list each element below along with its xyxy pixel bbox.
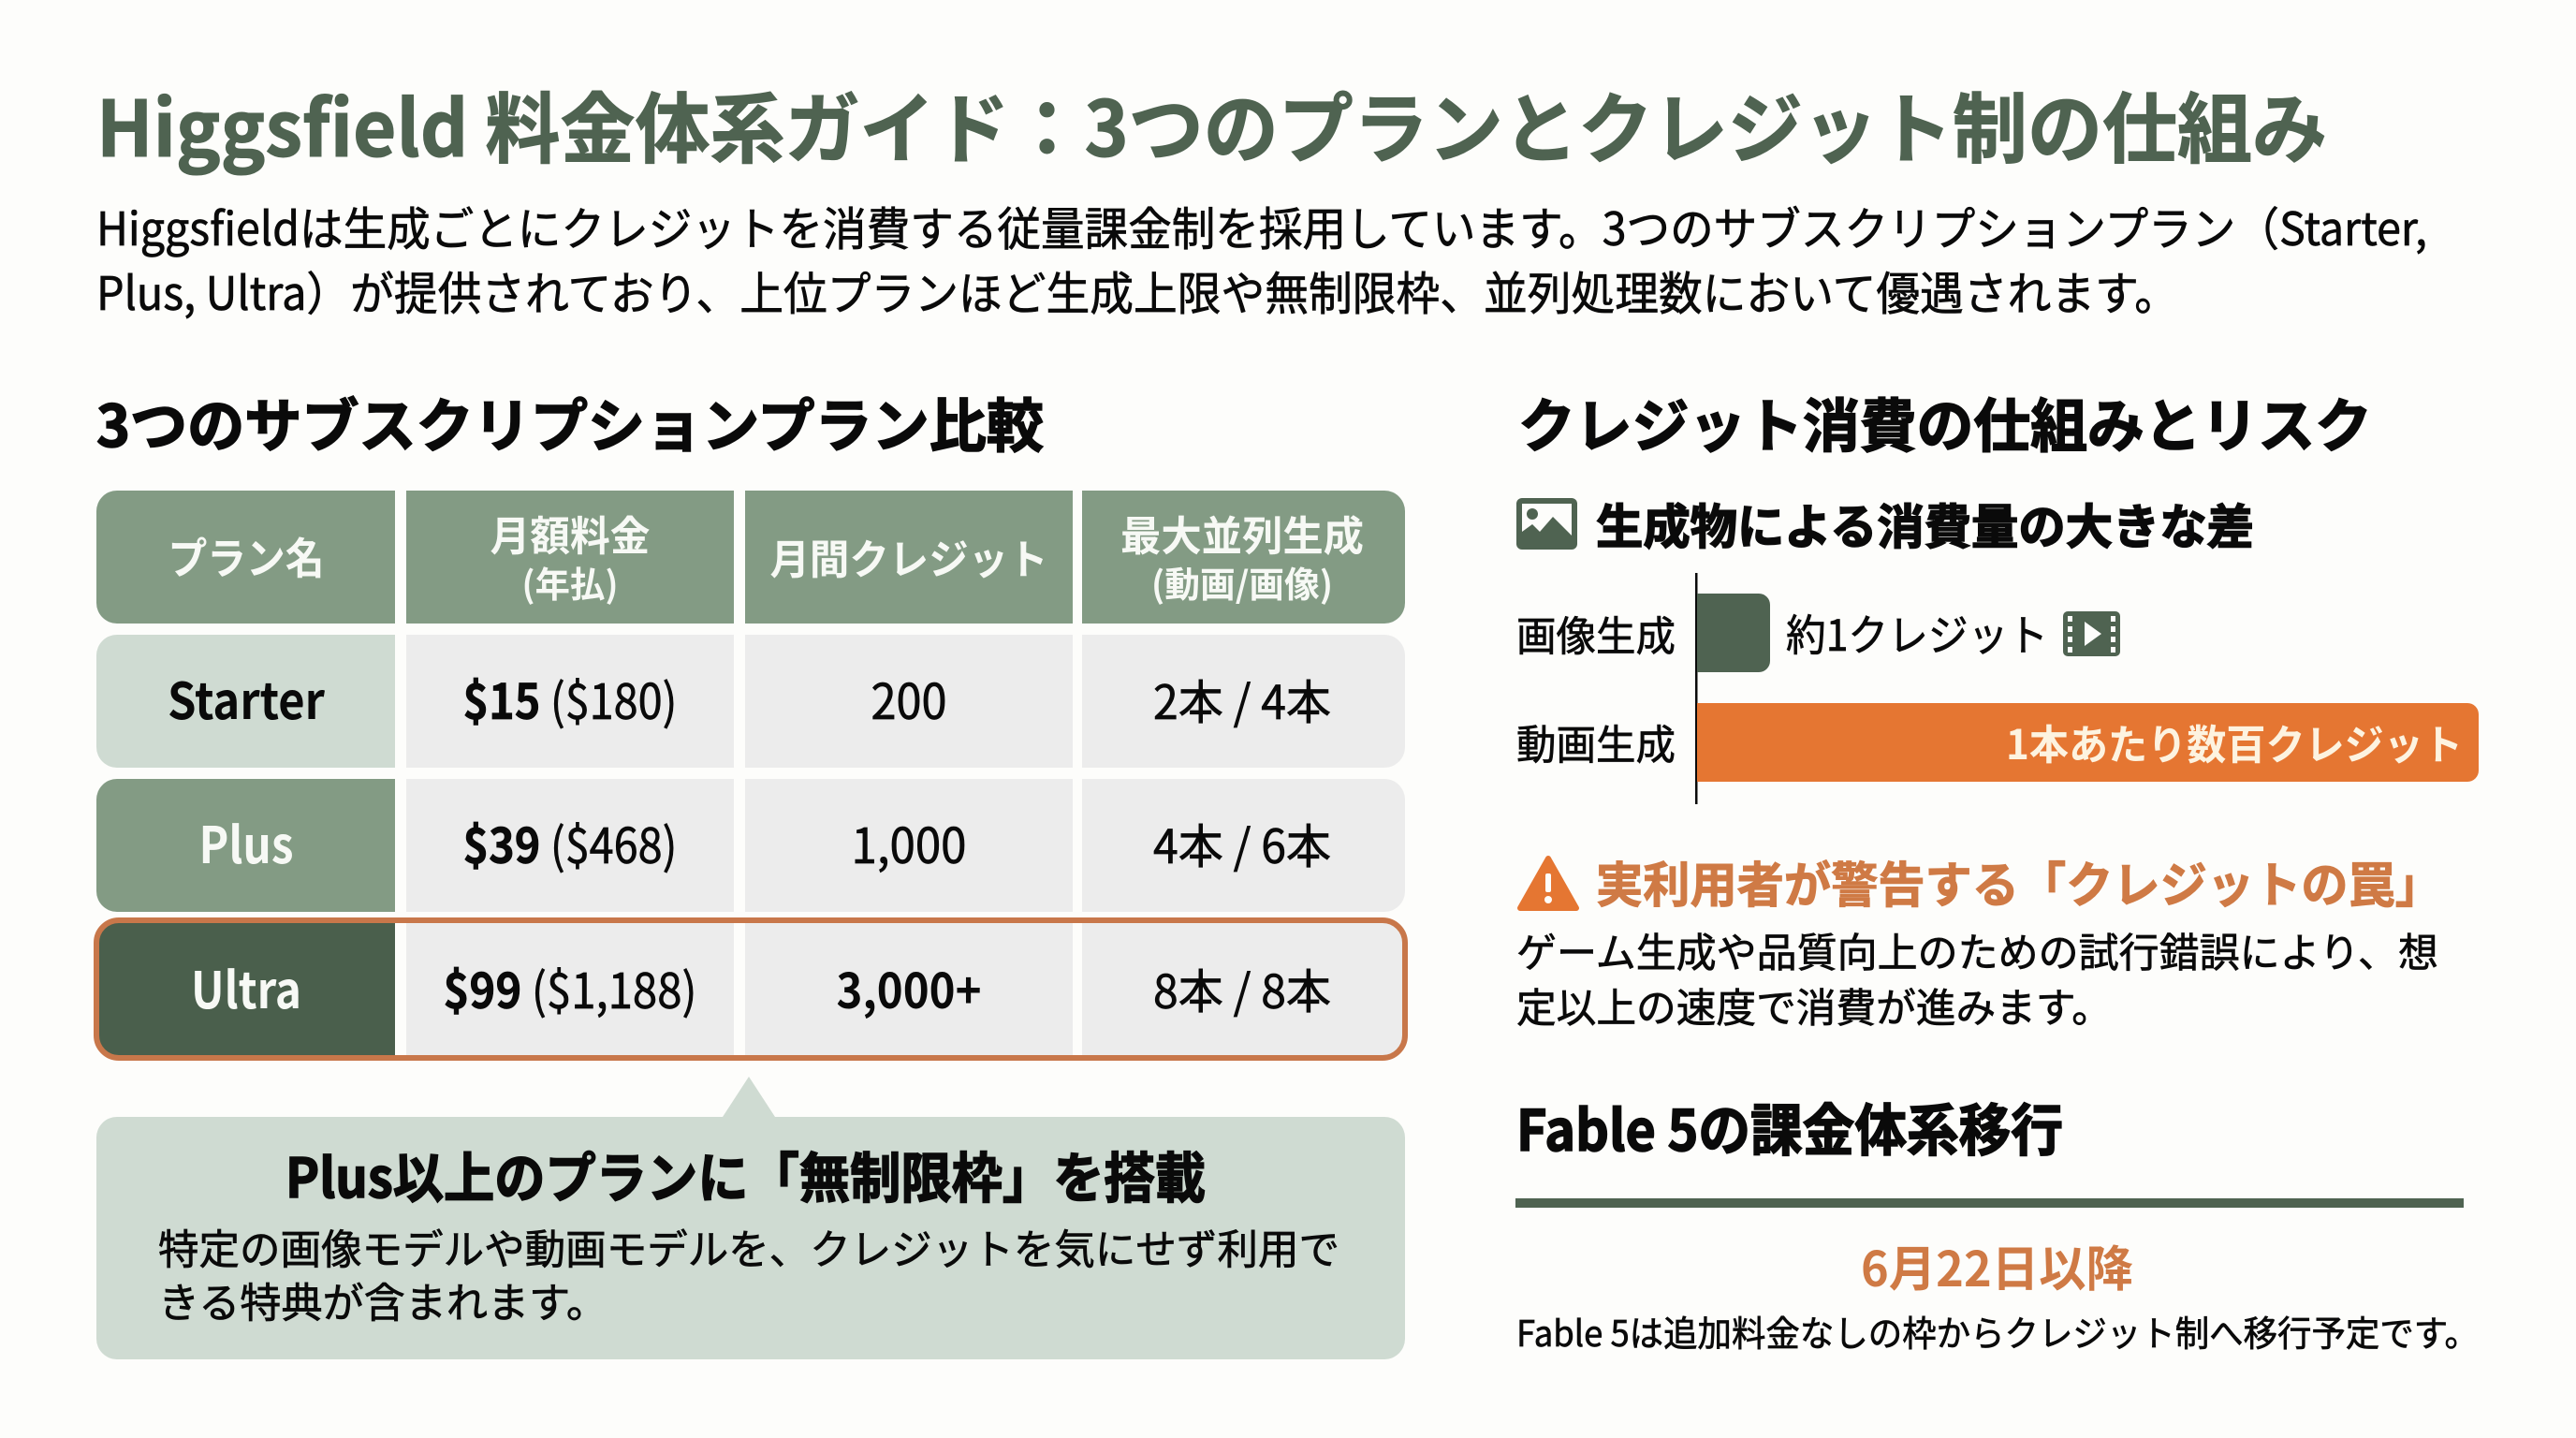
- bar: image generation: [1516, 594, 2048, 672]
- table row: Plus: 4本 / 6本: [1153, 810, 1331, 877]
- warning heading: 実利用者が警告する「クレジットの罠」: [1596, 846, 2442, 917]
- heading: plan comparison: 3つのサブスクリプションプラン比較: [96, 379, 1044, 463]
- intro text: [96, 193, 2427, 324]
- table row: Plus: 1,000: [852, 807, 966, 877]
- icon: film: [2063, 611, 2120, 656]
- date highlight: 6月22日以降: [1861, 1230, 2133, 1300]
- axis: [1695, 573, 1698, 804]
- table row: Ultra (highlighted): 8本 / 8本: [1153, 955, 1331, 1022]
- table row: Ultra (highlighted): Ultra: [191, 949, 301, 1023]
- table row: Starter: [96, 635, 1405, 768]
- bar: video generation: 1本あたり数百クレジット: [2006, 712, 2463, 771]
- panel: plan comparison table: [96, 491, 1405, 1058]
- bar: video generation: 動画生成: [1516, 712, 1676, 771]
- table row: Ultra (highlighted): [96, 920, 1405, 1058]
- Fable 5 note: Fable 5は追加料金なしの枠からクレジット制へ移行予定です。: [1516, 1305, 2479, 1357]
- table row: Starter: 200: [871, 663, 947, 733]
- table row: Ultra (highlighted): 3,000+: [837, 952, 981, 1022]
- title: Higgsfield 料金体系ガイド：3つのプランとクレジット制の仕組み: [96, 67, 2327, 179]
- table header row: (動画/画像): [1151, 556, 1333, 608]
- table header row: (年払): [522, 556, 618, 608]
- bar: image generation: 約1クレジット: [1786, 602, 2048, 664]
- bar: video generation: [1516, 703, 2479, 782]
- heading: Fable 5 billing transition: Fable 5の課金体系移行: [1516, 1086, 2063, 1167]
- warning body text: 定以上の速度で消費が進みます。: [1516, 976, 2112, 1034]
- table row: Starter: 2本 / 4本: [1153, 666, 1331, 733]
- table row: Ultra (highlighted): $99 ($1,188): [444, 952, 696, 1022]
- callout: unlimited allowance: Plus以上のプランに「無制限枠」を搭載: [285, 1135, 1206, 1213]
- icon: warning: [1520, 858, 1576, 908]
- subheading: consumption difference: 生成物による消費量の大きな差: [1596, 489, 2254, 558]
- intro text: Higgsfieldは生成ごとにクレジットを消費する従量課金制を採用しています。3つのサブスクリプションプラン（Starter,: [96, 193, 2427, 259]
- table row: Plus: $39 ($468): [462, 807, 678, 877]
- table row: Starter: Starter: [168, 660, 325, 734]
- intro text: Plus, Ultra）が提供されており、上位プランほど生成上限や無制限枠、並列処理数において優遇されます。: [96, 257, 2178, 324]
- table header row: 最大並列生成: [1120, 503, 1364, 563]
- table header row: [96, 491, 1405, 624]
- table header row: 月間クレジット: [769, 526, 1048, 586]
- icon: image: [1516, 498, 1577, 550]
- table row: Plus: [96, 779, 1405, 912]
- bar chart: credit consumption: [1516, 573, 2479, 804]
- callout: unlimited allowance: [96, 1077, 1405, 1359]
- warning body text: ゲーム生成や品質向上のための試行錯誤により、想: [1516, 921, 2438, 979]
- callout: unlimited allowance: 特定の画像モデルや動画モデルを、クレジットを気にせず利用で: [158, 1216, 1339, 1276]
- table header row: プラン名: [168, 525, 324, 587]
- table row: Starter: $15 ($180): [462, 663, 678, 733]
- heading: credit mechanism and risk: クレジット消費の仕組みとリスク: [1518, 379, 2372, 463]
- table header row: 月額料金: [490, 503, 650, 563]
- table row: Plus: Plus: [198, 804, 294, 878]
- callout: unlimited allowance: きる特典が含まれます。: [158, 1269, 607, 1329]
- bar: image generation: 画像生成: [1516, 603, 1676, 663]
- warning body text: [1516, 921, 2438, 1034]
